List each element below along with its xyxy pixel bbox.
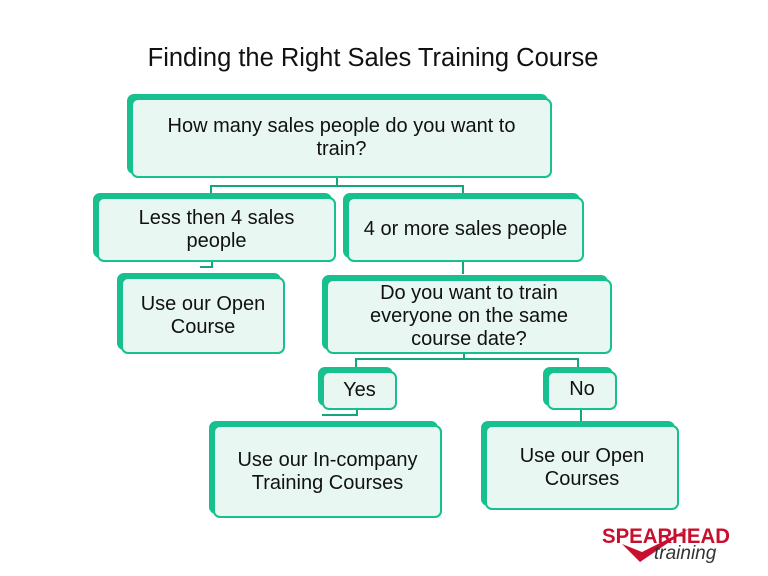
box: question 1 [131,98,552,178]
connectors [200,178,582,421]
box: yes: Yes [343,379,376,401]
box: question 1: How many sales people do you want to [168,115,515,137]
box: in-company: Training Courses [252,472,403,494]
box: less than 4 [97,197,336,262]
box: less than 4: Less then 4 sales [139,206,294,228]
logo: SPEARHEAD [602,525,730,548]
box: question 2 [326,279,612,354]
box: less than 4: people [186,230,247,252]
box: open course: Course [171,316,235,338]
box: no [547,371,617,410]
box: open courses: Courses [545,468,619,490]
box: question 2: Do you want to train [380,282,558,304]
box: 4 or more: 4 or more sales people [364,218,567,240]
box: in-company [213,425,442,518]
box: open courses [485,425,679,510]
box: 4 or more [347,197,584,262]
box: open course [121,277,285,354]
box: question 2: course date? [411,328,527,350]
box: in-company: Use our In-company [237,448,418,470]
box: question 2: everyone on the same [370,305,568,327]
title: Finding the Right Sales Training Course [148,44,598,72]
box: yes [322,371,397,410]
logo [602,525,730,564]
box: question 1: train? [316,138,366,160]
box: no: No [569,378,595,400]
box: open courses: Use our Open [520,444,644,466]
logo: training [654,543,716,564]
box: open course: Use our Open [141,292,265,314]
